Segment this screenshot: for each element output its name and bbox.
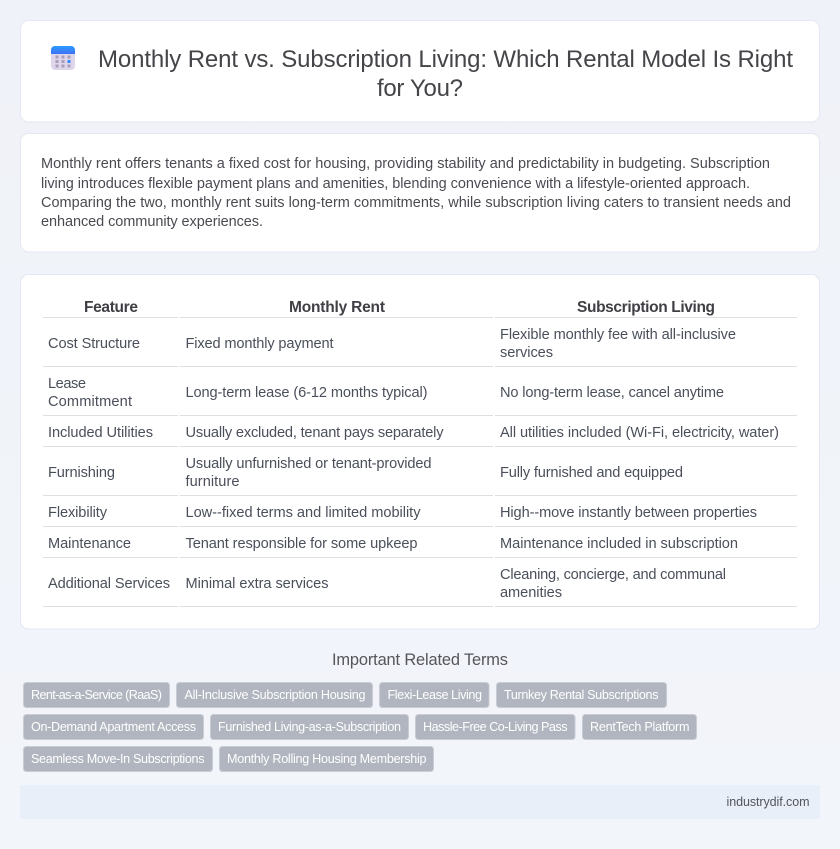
panel: related term tags bbox=[24, 682, 696, 772]
row: flexibility: Flexibility bbox=[48, 505, 108, 521]
title: for You? bbox=[377, 75, 463, 102]
title: Monthly Rent vs. Subscription Living: Which Rental Model Is Right bbox=[98, 46, 793, 73]
tag: On-Demand Apartment Access: On-Demand Apartment Access bbox=[31, 720, 196, 734]
row: additional services: Cleaning, concierge, and communal bbox=[500, 567, 726, 583]
tag: Rent-as-a-Service bbox=[24, 682, 170, 708]
row: cost structure: Fixed monthly payment bbox=[186, 336, 334, 352]
tag: RentTech Platform: RentTech Platform bbox=[590, 720, 690, 734]
tag: Turnkey Rental Subscriptions bbox=[496, 682, 666, 708]
row: additional services: amenities bbox=[500, 585, 562, 601]
row: furnishing: furniture bbox=[186, 474, 240, 490]
row: flexibility: Low--fixed terms and limited mobility bbox=[186, 505, 421, 521]
tag: Hassle-Free Co-Living Pass bbox=[416, 714, 575, 740]
tag: Turnkey Rental Subscriptions: Turnkey Rental Subscriptions bbox=[504, 688, 658, 702]
table header row: Feature bbox=[84, 299, 138, 316]
row: cost structure bbox=[48, 327, 736, 361]
row: included utilities: Included Utilities bbox=[48, 425, 153, 441]
table header row: Subscription Living bbox=[577, 299, 715, 316]
tag: Rent-as-a-Service: Rent-as-a-Service (RaaS) bbox=[31, 688, 162, 702]
tag: Furnished Living-as-a-Subscription bbox=[210, 714, 408, 740]
row: additional services: Minimal extra services bbox=[186, 576, 328, 592]
table header row bbox=[84, 299, 715, 316]
tag: RentTech Platform bbox=[582, 714, 696, 740]
panel: header bbox=[20, 20, 820, 122]
panel: introduction bbox=[20, 134, 820, 252]
tag: Seamless Move-In Subscriptions: Seamless Move-In Subscriptions bbox=[31, 752, 204, 766]
row: cost structure: Flexible monthly fee with all-inclusive bbox=[500, 327, 736, 343]
panel: comparison table bbox=[20, 274, 820, 629]
row: additional services: Additional Services bbox=[48, 576, 170, 592]
row: furnishing bbox=[48, 456, 683, 490]
text block: introduction paragraph: enhanced community experiences. bbox=[41, 214, 263, 230]
row: maintenance: Maintenance bbox=[48, 536, 131, 552]
tag: Furnished Living-as-a-Subscription: Furnished Living-as-a-Subscription bbox=[218, 720, 401, 734]
tag: Flexi-Lease Living: Flexi-Lease Living bbox=[388, 688, 482, 702]
table header row: Monthly Rent bbox=[289, 299, 385, 316]
panel: footer: industrydif.com bbox=[726, 795, 810, 809]
tag: Hassle-Free Co-Living Pass: Hassle-Free Co-Living Pass bbox=[423, 720, 568, 734]
heading: important related terms: Important Related Terms bbox=[332, 651, 508, 669]
panel: footer bbox=[20, 785, 820, 819]
title bbox=[98, 46, 793, 102]
row: furnishing: Furnishing bbox=[48, 465, 115, 481]
tag: Flexi-Lease Living bbox=[380, 682, 489, 708]
tag: Monthly Rolling Housing Membership: Monthly Rolling Housing Membership bbox=[227, 752, 426, 766]
row: additional services bbox=[48, 567, 726, 601]
row: included utilities bbox=[48, 425, 779, 441]
row: flexibility: High--move instantly between properties bbox=[500, 505, 757, 521]
row: included utilities: Usually excluded, tenant pays separately bbox=[186, 425, 444, 441]
row: lease commitment: Commitment bbox=[48, 394, 132, 410]
tag: Seamless Move-In Subscriptions bbox=[24, 746, 212, 772]
tag: All-Inclusive Subscription Housing: All-Inclusive Subscription Housing bbox=[184, 688, 366, 702]
row: maintenance: Tenant responsible for some upkeep bbox=[186, 536, 418, 552]
row: flexibility bbox=[48, 505, 757, 521]
row: maintenance bbox=[48, 536, 738, 552]
tag: All-Inclusive Subscription Housing bbox=[176, 682, 372, 708]
row: included utilities: All utilities included (Wi-Fi, electricity, water) bbox=[500, 425, 779, 441]
row: lease commitment bbox=[48, 376, 724, 410]
row: cost structure: Cost Structure bbox=[48, 336, 140, 352]
text block: introduction paragraph: Monthly rent offers tenants a fixed cost for housing, providing stability and predictability in budgeting. Subscription bbox=[41, 156, 770, 172]
row: lease commitment: Lease bbox=[48, 376, 86, 392]
row: furnishing: Fully furnished and equipped bbox=[500, 465, 683, 481]
tag: Monthly Rolling Housing Membership bbox=[220, 746, 434, 772]
row: lease commitment: No long-term lease, cancel anytime bbox=[500, 385, 724, 401]
icon: calendar bbox=[51, 46, 75, 70]
tag: On-Demand Apartment Access bbox=[24, 714, 204, 740]
row: maintenance: Maintenance included in subscription bbox=[500, 536, 738, 552]
text block: introduction paragraph bbox=[41, 156, 791, 230]
text block: introduction paragraph: Comparing the two, monthly rent suits long-term commitments, while subscription living caters to transient needs and bbox=[41, 195, 791, 211]
row: cost structure: services bbox=[500, 345, 553, 361]
text block: introduction paragraph: living introduces flexible payment plans and amenities, blending convenience with a lifestyle-oriented approach. bbox=[41, 176, 750, 192]
row: lease commitment: Long-term lease (6-12 months typical) bbox=[186, 385, 428, 401]
row: furnishing: Usually unfurnished or tenant-provided bbox=[186, 456, 432, 472]
